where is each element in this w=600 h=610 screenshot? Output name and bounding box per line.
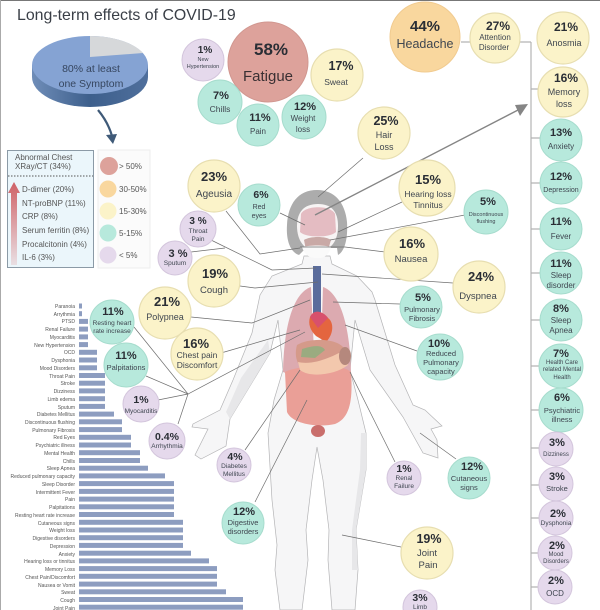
bubble: red eyes: [238, 184, 280, 226]
bubble: throat pain: Throat: [189, 228, 208, 235]
bubble: chest pain discomfort: Discomfort: [177, 360, 218, 370]
bubble: health care related mental health: related Mental: [543, 367, 581, 373]
bubble: arrhythmia: [149, 423, 185, 459]
bubble: sleep apnea: Sleep: [551, 316, 572, 325]
bubble: reduced pulmonary capacity: capacity: [427, 367, 455, 376]
bar chart: symptom frequency: Nausea or Vomit: [38, 583, 76, 589]
panel: laboratory findings: IL-6 (3%): [22, 253, 55, 262]
bubble: pain: [237, 104, 279, 146]
bubble: discontinuous flushing: [464, 190, 508, 234]
bubble: anxiety: 13%: [550, 127, 572, 139]
bubble: new hypertension: Hypertension: [187, 64, 219, 70]
bar chart: symptom frequency: Dysphonia: [51, 358, 75, 364]
pie chart: 80% at least one symptom: 80% at least: [62, 63, 120, 75]
bubble: fatigue: Fatigue: [243, 68, 293, 85]
bubble: renal failure: Failure: [394, 483, 414, 490]
bubble: depression: 12%: [550, 171, 572, 183]
bubble: renal failure: [387, 461, 421, 495]
bubble: red eyes: Red: [253, 204, 266, 211]
bubble: anosmia: [537, 12, 589, 64]
bubble: cough: [188, 255, 240, 307]
bar chart: symptom frequency: Limb edema: [47, 397, 75, 403]
bubble: sleep apnea: 8%: [553, 303, 569, 315]
bubble: sputum: 3 %: [169, 248, 188, 260]
human body figure: [192, 190, 442, 610]
bubble: OCD: 2%: [548, 575, 564, 587]
bubble: arrhythmia: 0.4%: [155, 431, 180, 443]
bubble: limb edema: [403, 590, 437, 610]
bubble: OCD: [538, 570, 572, 604]
bubble: discontinuous flushing: flushing: [477, 219, 495, 225]
bubble: stroke: 3%: [549, 471, 565, 483]
bar chart: symptom frequency: PTSD: [62, 319, 75, 325]
bubble: sweat: [311, 49, 363, 101]
bubble: stroke: [539, 467, 573, 501]
bubble: health care related mental health: 7%: [553, 348, 569, 360]
bubble: resting heart rate increase: [90, 300, 134, 344]
bubble: dyspnea: 24%: [468, 269, 494, 284]
bubble: dyspnea: [453, 261, 505, 313]
bar chart: symptom frequency: Anxiety: [59, 552, 75, 558]
bubble: palpitations: Palpitations: [107, 363, 146, 372]
bubble: nausea: 16%: [399, 236, 425, 251]
body silhouette: [192, 256, 442, 610]
bar chart: symptom frequency: Cutaneous signs: [38, 521, 75, 527]
bubble: sleep disorder: Sleep: [551, 271, 572, 280]
bubble: sleep disorder: [540, 252, 582, 294]
bubble: pain: 11%: [249, 112, 271, 124]
bubble: hearing loss tinnitus: 15%: [415, 172, 441, 187]
bubble: limb edema: 3%: [412, 592, 428, 604]
bubble: OCD: OCD: [546, 589, 564, 598]
bubble: mood disorders: 2%: [549, 540, 565, 552]
bar chart: symptom frequency: Resting heart rate increase: [15, 513, 75, 519]
bubble: dizziness: Dizziness: [543, 452, 569, 458]
bubble: fever: 11%: [550, 216, 572, 228]
bubble: psychiatric illness: [539, 388, 583, 432]
bubble: nausea: Nausea: [395, 254, 428, 265]
bubble: polypnea: Polypnea: [146, 312, 184, 322]
bubble: dysphonia: [539, 501, 573, 535]
bubble: joint pain: Pain: [418, 560, 438, 571]
bubble: discontinuous flushing: Discontinuous: [469, 212, 504, 218]
bubble: pulmonary fibrosis: Pulmonary: [404, 305, 440, 314]
lung right: [321, 287, 351, 375]
bar chart: symptom frequency: Red Eyes: [53, 435, 75, 441]
bubble: resting heart rate increase: rate increase: [93, 328, 131, 335]
bubble: pulmonary fibrosis: Fibrosis: [409, 314, 435, 323]
bubble: diabetes mellitus: 4%: [227, 451, 243, 463]
bubble: depression: Depression: [543, 187, 579, 194]
heart: [309, 312, 332, 342]
bubble: new hypertension: New: [197, 57, 209, 63]
bubble: anxiety: [540, 119, 582, 161]
bubble: ageusia: [188, 160, 240, 212]
bubble: fever: Fever: [551, 232, 572, 241]
bubble: nausea: [384, 227, 438, 281]
bubble: weight loss: [282, 95, 326, 139]
bar chart: symptom frequency: Sleep Apnea: [47, 466, 75, 472]
bar chart: symptom frequency: Digestive disorders: [32, 536, 75, 542]
bubble: hearing loss tinnitus: [399, 160, 455, 216]
panel: laboratory findings: CRP (8%): [22, 212, 58, 221]
bubble: attention disorder: Disorder: [479, 43, 509, 52]
bar chart: symptom frequency: Chest Pain/Discomfort: [25, 575, 76, 581]
bubble: fatigue: 58%: [254, 40, 288, 59]
bubble: cough: 19%: [202, 266, 228, 281]
panel: laboratory findings: [8, 150, 94, 268]
bar chart: symptom frequency: Chills: [63, 459, 75, 465]
bubble: headache: [390, 2, 460, 72]
bubble: hair loss: Loss: [374, 142, 394, 152]
bubble: weight loss: 12%: [294, 101, 316, 113]
bar chart: symptom frequency: Weight loss: [49, 528, 75, 534]
bar chart: symptom frequency: Diabetes Mellitus: [37, 412, 75, 418]
legend: prevalence colours: > 50%: [119, 162, 142, 171]
bubble: dysphonia: Dysphonia: [541, 520, 572, 527]
bubble: sleep disorder: 11%: [550, 258, 572, 270]
bubble: polypnea: [139, 287, 191, 339]
bubble: renal failure: Renal: [396, 475, 413, 482]
bubble: psychiatric illness: Psychiatric: [544, 406, 580, 415]
bubble: depression: [540, 162, 582, 204]
panel: laboratory findings: Serum ferritin (8%): [22, 226, 89, 235]
pie chart: 80% at least one symptom: [32, 36, 148, 107]
bubble: reduced pulmonary capacity: [417, 334, 463, 380]
legend: prevalence colours: 30-50%: [119, 185, 147, 194]
bubble: chills: Chills: [210, 104, 230, 114]
bar chart: symptom frequency: Cough: [60, 598, 75, 604]
bubble: chest pain discomfort: 16%: [183, 336, 209, 351]
bar chart: symptom frequency: Psychiatric illness: [36, 443, 75, 449]
bubble: ageusia: 23%: [201, 169, 227, 184]
chin: [302, 246, 331, 258]
bubble: myocarditis: 1%: [133, 394, 149, 406]
bubble: red eyes: eyes: [252, 213, 267, 220]
bubble: health care related mental health: Health Care: [546, 360, 579, 366]
bubble: new hypertension: [182, 39, 224, 81]
bubble: dizziness: [539, 432, 573, 466]
bar chart: symptom frequency: Throat Pain: [49, 374, 75, 380]
bubble: throat pain: Pain: [191, 236, 205, 243]
bubble: memory loss: 16%: [554, 71, 578, 85]
bubble: myocarditis: [123, 386, 159, 422]
bubble: headache: 44%: [410, 18, 440, 35]
bar chart: symptom frequency: Stroke: [61, 381, 75, 387]
liver and stomach: [296, 340, 345, 368]
bubble: arrhythmia: Arrhythmia: [151, 443, 183, 450]
bubble: palpitations: [104, 343, 148, 387]
bubble: hair loss: 25%: [373, 114, 399, 128]
bubble: sleep apnea: Apnea: [549, 326, 573, 335]
bubble: resting heart rate increase: Resting heart: [93, 320, 132, 327]
bar chart: symptom frequency: Paranoia: [55, 304, 75, 310]
bar chart: symptom frequency: Discontinuous flushing: [25, 420, 75, 426]
panel: laboratory findings: Procalcitonin (4%): [22, 240, 87, 249]
bubble: headache: Headache: [396, 37, 454, 51]
trachea: [313, 266, 321, 324]
bubble: mood disorders: Disorders: [543, 559, 569, 565]
bubble: weight loss: loss: [296, 125, 310, 134]
bubble: cutaneous signs: Cutaneous: [451, 474, 487, 483]
bubble: chills: [198, 80, 242, 124]
bubble: diabetes mellitus: [217, 448, 251, 482]
bubble: health care related mental health: [539, 344, 583, 388]
bar chart: symptom frequency: Memory Loss: [45, 567, 75, 573]
bubble: pulmonary fibrosis: 5%: [415, 292, 431, 304]
bubble: cutaneous signs: [448, 457, 490, 499]
bubble: ageusia: Ageusia: [196, 189, 233, 200]
bubble: sweat: Sweat: [324, 77, 348, 87]
bar chart: symptom frequency: Renal Failure: [45, 327, 75, 333]
bubble: dysphonia: 2%: [550, 508, 566, 520]
bubble: reduced pulmonary capacity: Pulmonary: [423, 358, 459, 367]
bar chart: symptom frequency: Palpitations: [49, 505, 75, 511]
bubble: myocarditis: Myocarditis: [125, 408, 158, 415]
bubble: diabetes mellitus: Diabetes: [221, 463, 248, 470]
bubble: psychiatric illness: illness: [552, 415, 573, 424]
bubble: cough: Cough: [200, 285, 228, 296]
bubble: dizziness: 3%: [549, 437, 565, 449]
bubble: sweat: 17%: [328, 59, 354, 73]
bar chart: symptom frequency: Hearing loss or tinnitus: [24, 559, 75, 565]
panel: laboratory findings: NT-proBNP (11%): [22, 199, 86, 208]
bubble: digestive disorders: 12%: [233, 506, 255, 518]
bubble: throat pain: 3 %: [189, 216, 207, 227]
bar chart: symptom frequency: Depression: [50, 544, 75, 550]
limb shading: [226, 340, 366, 570]
arrow: pie to lab panel: [98, 110, 117, 144]
bubble: sleep disorder: disorder: [547, 281, 576, 290]
bubble: new hypertension: 1%: [198, 45, 212, 56]
right column connector: [461, 42, 541, 610]
bubble: memory loss: loss: [556, 99, 572, 109]
bubble: fever: [540, 208, 582, 250]
title: Long-term effects of COVID-19: [17, 7, 236, 24]
bubble: hair loss: Hair: [376, 130, 392, 140]
bar chart: symptom frequency: Sweat: [61, 590, 76, 596]
bubble: chest pain discomfort: [171, 328, 223, 380]
bar chart: symptom frequency: Sputum: [58, 405, 75, 411]
bubble: digestive disorders: [222, 502, 264, 544]
bar chart: symptom frequency: Dizziness: [54, 389, 75, 395]
bubble: attention disorder: Attention: [479, 33, 511, 42]
bubble: pain: Pain: [250, 127, 266, 136]
bar chart: symptom frequency: Pulmonary Fibrosis: [32, 428, 75, 434]
kidney: [339, 347, 351, 365]
bubble: polypnea: 21%: [154, 294, 180, 309]
bubble: discontinuous flushing: 5%: [480, 196, 496, 208]
face: [297, 204, 338, 251]
bubble: sleep apnea: [540, 299, 582, 341]
bubble: joint pain: Joint: [417, 548, 437, 559]
panel: laboratory findings: XRay/CT (34%): [15, 162, 71, 171]
bubble: joint pain: [401, 527, 453, 579]
bar chart: symptom frequency: Myocarditis: [50, 335, 75, 341]
bubble: throat pain: [180, 211, 216, 247]
bubble: psychiatric illness: 6%: [554, 392, 570, 404]
bar chart: symptom frequency: OCD: [64, 350, 75, 356]
bubble: digestive disorders: disorders: [228, 527, 259, 536]
bubble: hair loss: [358, 107, 410, 159]
legend: prevalence colours: 15-30%: [119, 207, 147, 216]
bubble: renal failure: 1%: [396, 463, 412, 475]
bubble: joint pain: 19%: [416, 532, 442, 546]
bar chart: symptom frequency: Intermittent Fever: [36, 490, 75, 496]
bubble: palpitations: 11%: [115, 350, 137, 362]
bubble: fatigue: [228, 22, 308, 102]
bar chart: symptom frequency: Arrythmia: [54, 312, 75, 318]
bar chart: symptom frequency: Mood Disorders: [40, 366, 75, 372]
bubble: attention disorder: [470, 13, 520, 63]
panel: laboratory findings: Abnormal Chest: [15, 153, 73, 162]
pie chart: 80% at least one symptom: one Symptom: [59, 78, 124, 90]
bubble: pulmonary fibrosis: [400, 286, 442, 328]
bubble: sputum: Sputum: [164, 260, 186, 267]
bubble: chest pain discomfort: Chest pain: [177, 350, 218, 360]
bar chart: symptom frequency: [11, 304, 243, 610]
bubble: dyspnea: Dyspnea: [459, 291, 497, 302]
bubble: mood disorders: [538, 536, 572, 570]
bubble: cutaneous signs: signs: [460, 483, 478, 492]
bubble: digestive disorders: Digestive: [228, 518, 258, 527]
arrow: head to right column: [315, 104, 528, 215]
bubble: mood disorders: Mood: [548, 552, 564, 558]
bubble: chills: 7%: [213, 90, 229, 102]
panel: laboratory findings: D-dimer (20%): [22, 185, 74, 194]
legend: prevalence colours: [98, 150, 150, 268]
bubble: red eyes: 6%: [253, 189, 269, 201]
bar chart: symptom frequency: Reduced pulmonary capacity: [11, 474, 75, 480]
bubble: anxiety: Anxiety: [548, 142, 574, 151]
bladder: [311, 425, 325, 437]
bubble: resting heart rate increase: 11%: [102, 306, 124, 318]
bar chart: symptom frequency: Pain: [65, 497, 75, 503]
legend: prevalence colours: < 5%: [119, 251, 137, 260]
hair: [287, 190, 347, 255]
bubble: sputum: [158, 241, 192, 275]
bubble: hearing loss tinnitus: Hearing loss: [404, 189, 452, 199]
lung left: [283, 287, 314, 374]
bar chart: symptom frequency: Sleep Disorder: [42, 482, 75, 488]
bubble: diabetes mellitus: Mellitus: [223, 471, 246, 478]
bubble: anosmia: Anosmia: [546, 38, 582, 48]
legend: prevalence colours: 5-15%: [119, 229, 142, 238]
bubble: anosmia: 21%: [554, 20, 578, 34]
intestines: [285, 366, 352, 426]
bubble: cutaneous signs: 12%: [461, 461, 483, 473]
bubble: memory loss: Memory: [548, 87, 581, 97]
bar chart: symptom frequency: Mental Health: [44, 451, 75, 457]
bar chart: symptom frequency: New Hypertension: [34, 343, 75, 349]
bubble: hearing loss tinnitus: Tinnitus: [413, 200, 443, 210]
leader lines: [134, 158, 465, 547]
bubble: memory loss: [538, 67, 588, 117]
bubble: stroke: Stroke: [546, 484, 568, 493]
bubble: reduced pulmonary capacity: 10%: [428, 338, 450, 350]
bubble: health care related mental health: Health: [553, 375, 571, 381]
bubble: weight loss: Weight: [291, 114, 316, 123]
bubble: attention disorder: 27%: [486, 19, 510, 33]
bubble: reduced pulmonary capacity: Reduced: [426, 349, 456, 358]
